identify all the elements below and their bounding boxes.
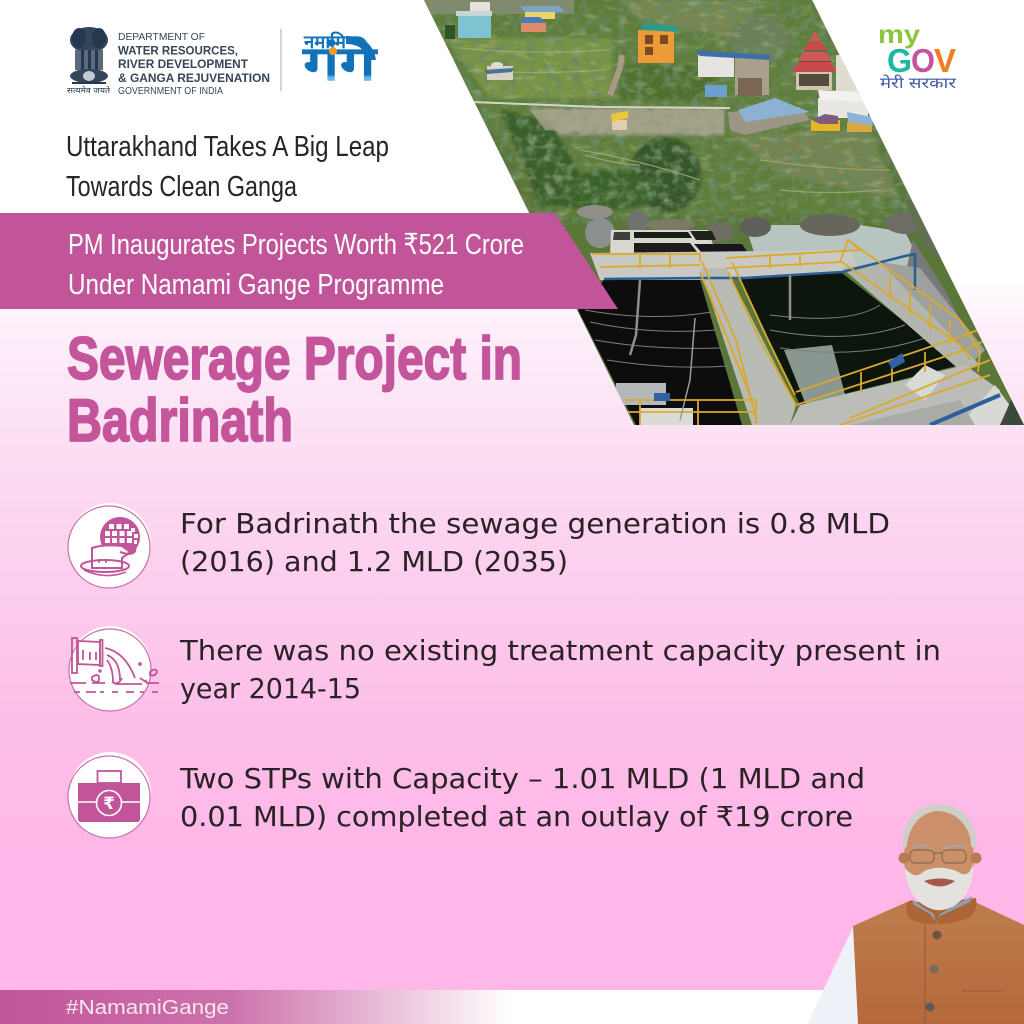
point 3: [68, 752, 865, 838]
vest: [853, 902, 1024, 1024]
text: two STPs: 0.01 MLD) completed at an outlay of ₹19 crore: [180, 801, 853, 833]
central buildings: [698, 55, 734, 77]
department name: & GANGA REJUVENATION: [118, 73, 270, 85]
yellow railings: [592, 240, 990, 425]
emblem motto: सत्यमेव जयते: [67, 85, 110, 95]
text: sewage generation: [180, 508, 890, 578]
text: no treatment capacity: [179, 635, 941, 705]
bottom right platform: [790, 365, 1000, 425]
small upper tanks: [610, 230, 713, 253]
hair: [902, 804, 977, 850]
MyGov logo: my: [878, 19, 921, 49]
icon: discharge pipe: [69, 626, 159, 711]
point 1: [68, 503, 890, 588]
tension lines: [585, 305, 925, 367]
heading: Uttarakhand: Towards Clean Ganga: [66, 171, 298, 203]
Namami Gange logo: [302, 31, 379, 91]
right black tank: [740, 273, 960, 405]
banner: PM inaugurates: [0, 213, 618, 309]
icon: rupee briefcase: [68, 752, 151, 838]
MyGov logo: V: [934, 42, 956, 79]
department name: GOVERNMENT OF INDIA: [118, 86, 223, 97]
footer hashtag bar: #NamamiGange: [66, 997, 229, 1019]
department name: RIVER DEVELOPMENT: [118, 59, 248, 71]
yellow shed: [811, 120, 840, 131]
banner: PM inaugurates: PM Inaugurates Projects Worth ₹521 Crore: [68, 229, 524, 261]
government department logo: [67, 27, 270, 97]
top deck: [590, 250, 860, 280]
white right building: [818, 98, 868, 118]
left black tank: [578, 280, 742, 425]
icon: rupee briefcase: ₹: [103, 794, 115, 813]
MyGov logo: मेरी सरकार: [880, 74, 957, 92]
text: two STPs: [179, 763, 865, 833]
small shrine left: [487, 66, 513, 80]
pipework: [630, 280, 640, 355]
text: sewage generation: For Badrinath the sewage generation is 0.8 MLD: [180, 508, 890, 540]
Namami Gange logo: नमामि: [303, 31, 347, 52]
central walkway: [700, 268, 796, 425]
long grey building: [728, 107, 810, 135]
terrace lines: [460, 48, 890, 192]
stone wall: [530, 110, 724, 133]
collar: [912, 896, 972, 924]
top-left houses: [424, 0, 574, 14]
MyGov logo: [878, 19, 957, 92]
text: sewage generation: (2016) and 1.2 MLD (2035): [180, 546, 568, 578]
text: no treatment capacity: year 2014-15: [180, 673, 361, 705]
text: no treatment capacity: There was no existing treatment capacity present in: [179, 635, 941, 667]
temple: [796, 70, 832, 90]
text: two STPs: Two STPs with Capacity – 1.01 MLD (1 MLD and: [179, 763, 865, 795]
glasses: [910, 850, 966, 863]
title: Sewerage Project in Badrinath: Badrinath: [67, 387, 293, 454]
portrait of the Prime Minister: [808, 804, 1024, 1024]
rocks and river: [577, 200, 1024, 425]
department name: WATER RESOURCES,: [118, 46, 238, 58]
path line: [472, 102, 730, 108]
beard: [905, 864, 973, 910]
white kurta: [808, 927, 862, 1024]
banner: PM inaugurates: Under Namami Gange Programme: [68, 269, 444, 301]
small yellow shed: [612, 120, 627, 130]
MyGov logo: G: [887, 42, 912, 79]
point 2: [69, 626, 941, 711]
MyGov logo: O: [911, 42, 935, 79]
right side structure: [907, 240, 958, 316]
blue pipe: [604, 254, 915, 290]
department name: [118, 31, 270, 97]
title: Sewerage Project in Badrinath: Sewerage Project in: [67, 325, 522, 392]
Namami Gange logo: गंगे: [302, 36, 379, 91]
orange house: [638, 30, 674, 63]
face: [904, 810, 974, 906]
footer hashtag bar: [0, 990, 1024, 1024]
heading: Uttarakhand: Uttarakhand Takes A Big Leap: [66, 131, 389, 163]
department name: DEPARTMENT OF: [118, 31, 205, 43]
icon: national emblem: [70, 27, 108, 84]
heading: Uttarakhand: [66, 131, 389, 203]
foliage texture: [424, 0, 924, 225]
photo: Badrinath village and treatment plant: [420, 0, 1024, 430]
title: Sewerage Project in Badrinath: [67, 325, 522, 454]
right walkway: [842, 262, 980, 372]
icon: sewage grid outlet: [68, 503, 151, 588]
